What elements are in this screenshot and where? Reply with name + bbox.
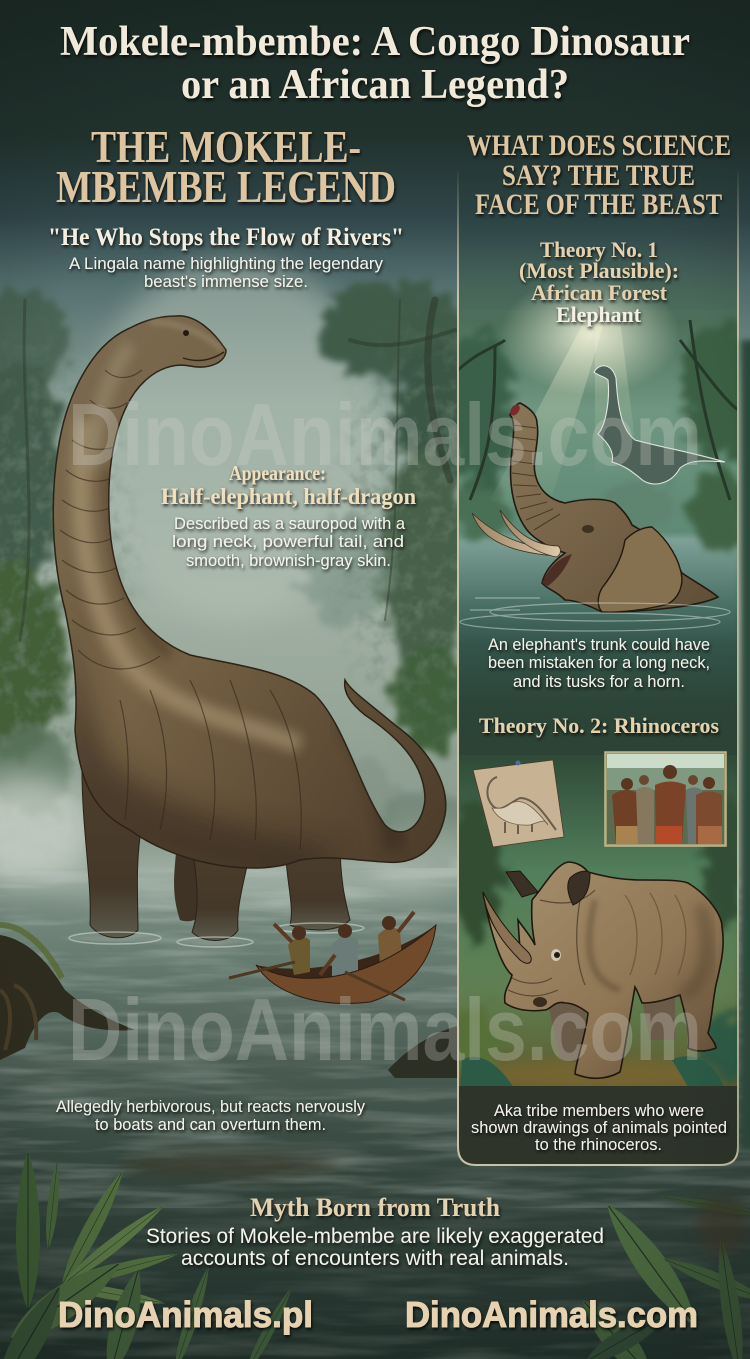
footer site links (58, 1294, 698, 1335)
conclusion: myth born from truth: Myth Born from Truth (250, 1193, 501, 1222)
elephant eye (582, 525, 594, 533)
rhinoceros (483, 862, 723, 1078)
background: misty distant trees (0, 280, 485, 875)
trunk tip mouth (510, 404, 520, 416)
theory 1 heading: Theory No. 1 (540, 237, 658, 262)
note: behaviour: to boats and can overturn them. (95, 1116, 326, 1134)
heading: the legend: MBEMBE LEGEND (56, 161, 396, 212)
theory 1 heading: Elephant (556, 302, 642, 327)
heading: what does science say (467, 129, 731, 221)
illustration: rowing boat with three men (229, 912, 436, 1003)
main title (60, 19, 690, 108)
ghost sauropod silhouette (594, 366, 725, 484)
callout: appearance (161, 461, 416, 570)
tusks (472, 510, 560, 557)
man right (378, 912, 414, 965)
theory 1 caption: An elephant's trunk could have (488, 636, 710, 654)
elephant body (510, 403, 718, 612)
ripples (460, 598, 730, 631)
theory 2 caption: to the rhinoceros. (535, 1136, 662, 1154)
main title: or an African Legend? (181, 62, 569, 108)
conclusion: myth born from truth (146, 1193, 604, 1270)
front near leg (82, 770, 142, 938)
subheading: quote and description (48, 224, 404, 291)
rhino scene (458, 755, 738, 1090)
callout: appearance: Half-elephant, half-dragon (161, 484, 416, 509)
subheading: quote and description: beast's immense size. (144, 272, 308, 291)
figures (612, 765, 722, 844)
footer site links: DinoAnimals.com (405, 1294, 698, 1335)
rhino horn (483, 892, 531, 963)
front plants (460, 1056, 724, 1086)
theory 2 caption: Aka tribe members who were (494, 1102, 704, 1120)
heading: the legend: THE MOKELE- (91, 121, 361, 172)
left bank roots (0, 925, 135, 1060)
head detail (150, 322, 224, 360)
far legs (549, 998, 675, 1062)
rhino shading (508, 890, 707, 996)
note: behaviour: Allegedly herbivorous, but reacts nervously (56, 1098, 366, 1116)
light rays (494, 320, 634, 494)
rhino nostril (533, 997, 547, 1007)
rhino eye (551, 949, 561, 961)
theory 1 caption: and its tusks for a horn. (513, 673, 685, 691)
right edge jungle (741, 340, 750, 1150)
illustration: panel backdrop and elephant scene (459, 227, 737, 1164)
theory 2 caption (471, 1102, 727, 1154)
theory 1 caption: been mistaken for a long neck, (488, 654, 710, 672)
rear leg centre (190, 835, 250, 940)
tree trunks and vines (20, 300, 455, 640)
right shore rocks (388, 1026, 458, 1078)
foliage speckle right (342, 344, 457, 728)
mist rising at the left shore (0, 775, 490, 902)
rhino ground (494, 1057, 722, 1086)
main title: Mokele-mbembe: A Congo Dinosaur (60, 19, 690, 65)
foliage speckle left (0, 367, 134, 764)
callout: appearance: Appearance: (229, 461, 326, 485)
theory 1 heading (519, 237, 679, 327)
water ripples around the legs (69, 923, 364, 947)
illustration: Mokele-mbembe sauropod (53, 316, 446, 940)
theory 1 caption (488, 636, 710, 691)
theory 1 heading: (Most Plausible): (519, 258, 679, 283)
note: behaviour (56, 1098, 366, 1134)
oars (229, 962, 405, 1000)
vines (458, 320, 738, 500)
subheading: quote and description: A Lingala name highlighting the legendary (69, 254, 383, 273)
photo of tribe members (605, 752, 726, 846)
theory 2 heading: Theory No. 2: Rhinoceros (479, 713, 719, 738)
paper sketch with pin (473, 760, 564, 847)
callout: appearance: long neck, powerful tail, and (172, 532, 404, 551)
man centre (320, 924, 358, 985)
callout: appearance: Described as a sauropod with a (174, 514, 406, 533)
boat interior (256, 925, 436, 987)
open mouth (542, 554, 572, 586)
conclusion: myth born from truth: Stories of Mokele-mbembe are likely exaggerated (146, 1224, 604, 1248)
body shading (60, 345, 395, 890)
foreground foliage bottom right (572, 1192, 750, 1359)
heading: what does science say: SAY? THE TRUE (502, 159, 695, 192)
jungle foliage around elephant (442, 320, 750, 552)
footer site links: DinoAnimals.pl (58, 1294, 313, 1335)
theory 2 caption: shown drawings of animals pointed (471, 1119, 727, 1137)
elephant ear (598, 527, 682, 612)
callout: appearance: smooth, brownish-gray skin. (186, 551, 391, 570)
far legs (174, 830, 215, 921)
sauropod body and neck (53, 316, 446, 868)
rear right leg (285, 835, 350, 930)
water surface (0, 868, 750, 1359)
subheading: quote and description: "He Who Stops the Flow of Rivers" (48, 224, 404, 251)
rhino scene foliage (451, 790, 750, 1086)
heading: the legend (56, 121, 396, 212)
panel frame (458, 170, 738, 1165)
text band (458, 645, 738, 761)
trunk wrinkles (512, 425, 560, 530)
elephant (472, 403, 718, 612)
conclusion: myth born from truth: accounts of encounters with real animals. (181, 1246, 569, 1270)
theory 1 heading: African Forest (531, 280, 668, 305)
foreground foliage bottom left (0, 1150, 297, 1359)
boat hull (256, 925, 436, 1003)
rhino body (483, 862, 723, 1078)
rhino ears (506, 871, 538, 897)
man left (274, 924, 310, 975)
caption band (458, 1086, 738, 1166)
